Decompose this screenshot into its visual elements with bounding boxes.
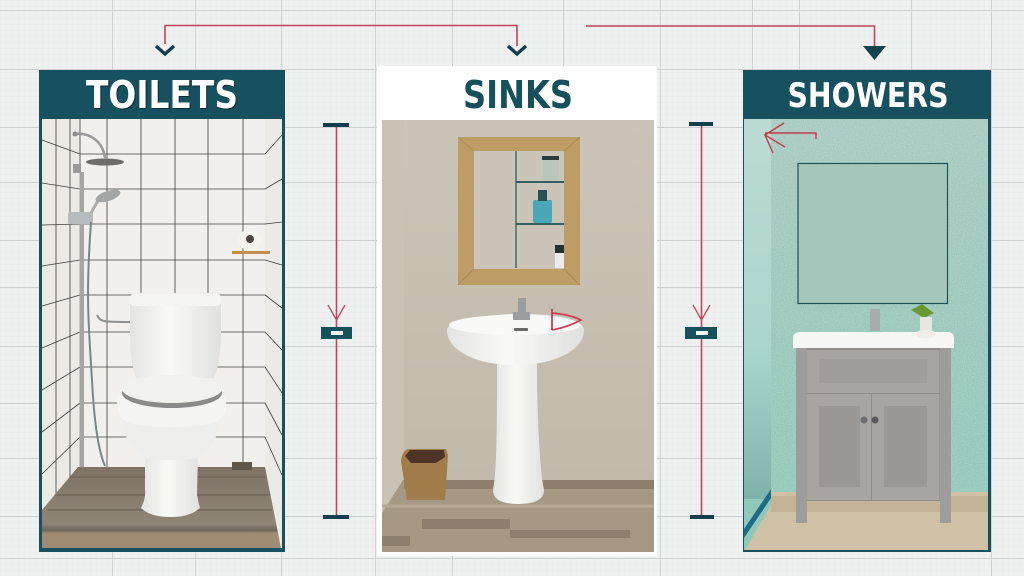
panel: showers — [743, 70, 991, 552]
icon: red arrow mark — [765, 123, 816, 153]
icon: shower fixture — [68, 132, 130, 467]
photo: pedestal sink — [382, 120, 654, 552]
vertical dimension line left — [321, 123, 352, 519]
panel: sinks — [377, 66, 657, 556]
heading: showers: SHOWERS — [788, 76, 948, 116]
icon: vanity cabinet — [793, 304, 954, 523]
top connector arrow to showers — [586, 26, 886, 60]
icon: shelf with toilet roll — [232, 229, 270, 254]
photo: tiled toilet room — [42, 119, 282, 548]
icon: basket — [401, 449, 448, 500]
panel: toilets — [39, 70, 285, 552]
icon: pedestal sink — [447, 298, 584, 504]
icon: toilet — [117, 294, 226, 517]
icon: red angle mark — [552, 309, 581, 330]
vertical dimension line right — [685, 122, 717, 519]
heading: toilets: TOILETS — [86, 73, 238, 117]
top connector arrow to toilets and sinks — [156, 26, 526, 54]
icon: wall mirror with shelves — [458, 137, 580, 285]
heading: sinks: SINKS — [463, 73, 573, 117]
icon: wall mirror — [798, 164, 948, 304]
photo: teal wall with vanity — [744, 119, 988, 550]
